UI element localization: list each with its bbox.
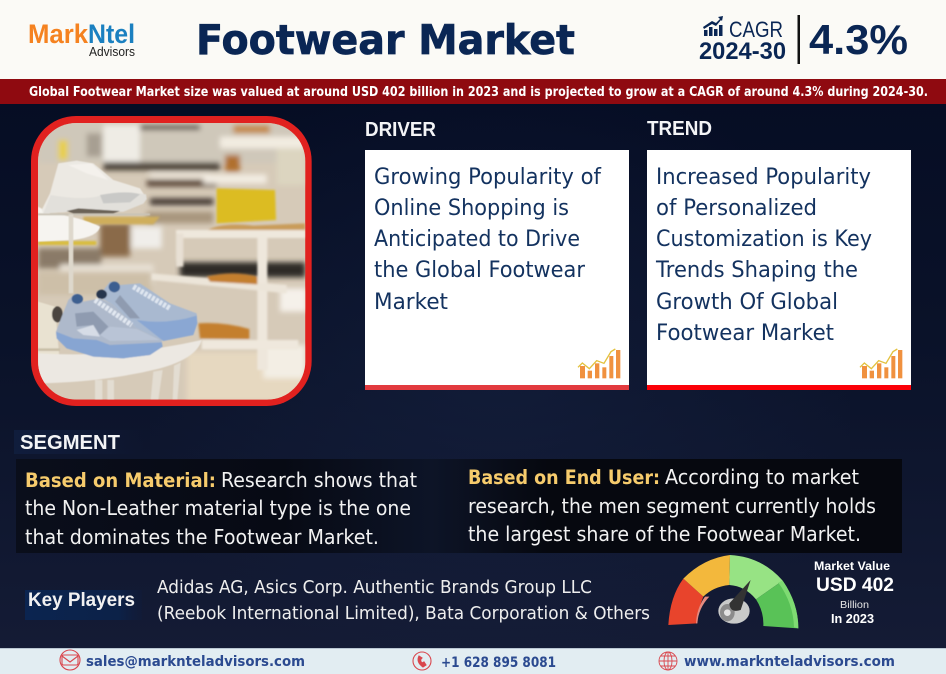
footer band [0, 648, 946, 674]
key players label [25, 590, 142, 620]
CAGR block [699, 15, 908, 65]
segment by material: Research shows that [221, 468, 417, 492]
logo: MarkNtel Advisors [28, 19, 135, 59]
contact: phone [413, 652, 556, 671]
driver text: Anticipated to Drive [374, 227, 580, 252]
key players list: (Reebok International Limited), Bata Corporation & Others [157, 603, 650, 624]
title: Footwear Market [196, 16, 575, 64]
contact: email [60, 650, 305, 670]
heading: segment [14, 430, 144, 454]
trend text: Trends Shaping the [655, 258, 858, 283]
header band [0, 0, 946, 79]
segment by material: the Non-Leather material type is the one [25, 496, 411, 520]
trend text: Growth Of Global [656, 290, 838, 315]
logo: MarkNtel Advisors: Advisors [89, 45, 135, 59]
summary banner [0, 79, 946, 104]
key players list: Adidas AG, Asics Corp. Authentic Brands Group LLC [157, 577, 592, 598]
front blue sneaker [56, 294, 162, 346]
contact: website: www.marknteladvisors.com [684, 654, 895, 670]
key players list [157, 577, 650, 624]
photo: sneakers in a store [31, 116, 312, 406]
CAGR block: 2024-30 [699, 38, 786, 65]
panel: segment [16, 459, 902, 553]
contact: phone: +1 628 895 8081 [441, 655, 556, 671]
driver text: Growing Popularity of [374, 165, 602, 190]
segment by end user: research, the men segment currently holds [468, 494, 876, 518]
logo: MarkNtel Advisors: Mark [28, 19, 89, 49]
heading: segment: SEGMENT [20, 432, 120, 454]
segment by end user: According to market [665, 465, 859, 489]
market value callout: USD 402 [816, 574, 894, 596]
gauge [668, 555, 798, 628]
segment by end user [468, 465, 876, 546]
segment by material [25, 468, 417, 549]
icon: globe [659, 652, 677, 670]
CAGR block: 4.3% [809, 16, 908, 63]
icon: growth bars [703, 16, 723, 36]
driver text: Online Shopping is [374, 196, 569, 221]
shelf and post [38, 213, 150, 215]
trend text [655, 165, 872, 346]
left box [38, 302, 60, 367]
contact: email: sales@marknteladvisors.com [86, 654, 305, 670]
segment by material: that dominates the Footwear Market. [25, 525, 379, 549]
icon: growth chart [860, 349, 902, 378]
back blue sneaker [98, 282, 197, 341]
trend text: Increased Popularity [656, 165, 871, 190]
white sneaker [42, 161, 147, 213]
dark object [52, 306, 63, 322]
market value callout: Billion [840, 599, 869, 611]
trend text: Customization is Key [656, 227, 872, 252]
CAGR block: CAGR [729, 17, 783, 42]
market value callout: In 2023 [831, 611, 874, 626]
segment by material: Based on Material: [25, 469, 216, 492]
segment by end user: the largest share of the Footwear Market. [468, 522, 861, 546]
icon: phone [413, 652, 431, 670]
key players label: Key Players [28, 590, 135, 611]
panel: trend [647, 150, 911, 390]
trend text: of Personalized [656, 196, 817, 221]
heading: driver: DRIVER [365, 119, 437, 141]
trend text: Footwear Market [656, 321, 834, 346]
segment by end user: Based on End User: [468, 466, 660, 489]
market value callout [814, 561, 894, 626]
logo: MarkNtel Advisors: Ntel [88, 19, 135, 49]
lower white sneaker [38, 207, 100, 242]
needle [718, 598, 750, 624]
table top [38, 340, 202, 383]
panel: driver [365, 150, 629, 390]
driver text: Market [374, 290, 448, 315]
driver text: the Global Footwear [374, 258, 586, 283]
icon: mail [60, 650, 80, 670]
driver text [374, 165, 602, 315]
market value callout: Market Value [814, 561, 890, 573]
icon: growth chart [578, 349, 620, 378]
heading: trend: TREND [647, 118, 712, 140]
